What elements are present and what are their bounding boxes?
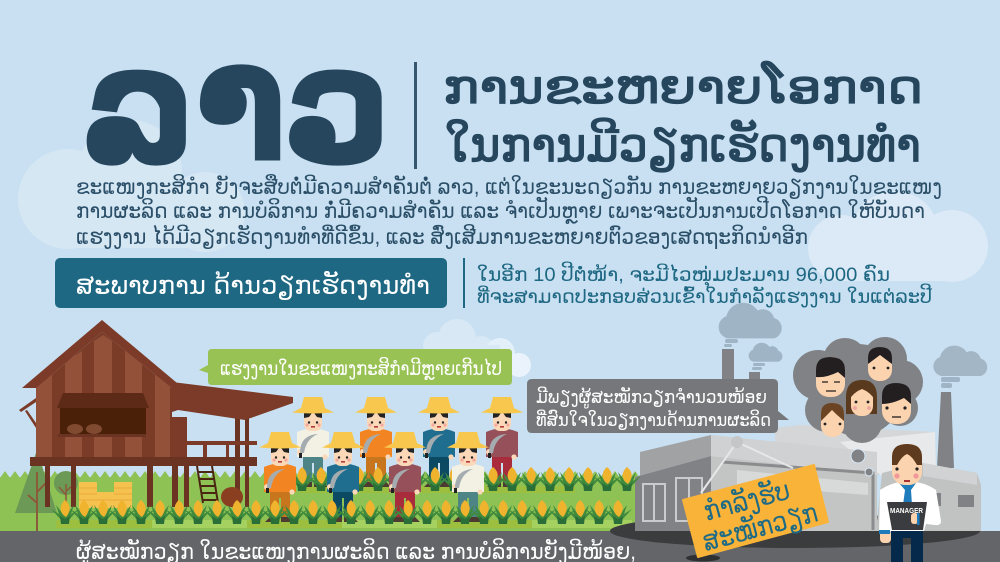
factory shadow [610, 514, 980, 548]
cloud: smoke 1 [719, 303, 782, 338]
hanging sign [683, 436, 828, 562]
rail [172, 441, 257, 457]
small bubble 1 [851, 449, 865, 463]
sign strings [701, 442, 793, 493]
tie [899, 483, 916, 505]
gutter [722, 462, 873, 530]
back row rice [288, 467, 641, 491]
factory building [635, 425, 981, 531]
face 3 [846, 380, 877, 416]
tree: triangle [15, 450, 57, 531]
left hand [880, 530, 891, 543]
clipboard [887, 502, 927, 530]
door [171, 417, 187, 457]
small bubble 2 [865, 468, 873, 476]
trousers [891, 525, 923, 562]
callout: too many agricultural workers: ແຮງງານໃນຂະແໜງກະສິກຳມີຫຼາຍເກີນໄປ [220, 356, 502, 381]
left block roof [635, 435, 711, 477]
sign board [683, 465, 828, 557]
thought bubble with faces [793, 337, 923, 476]
chimneys [722, 349, 954, 468]
title heading: ໃນການມີວຽກເຮັດງານທຳ [445, 118, 921, 172]
main roof band [711, 435, 877, 475]
manager figure [879, 444, 941, 562]
back roof [775, 425, 936, 475]
callout: few applicants: ທີ່ສົນໃຈໃນວຽກງານດ້ານການຜະລິດ [536, 409, 771, 430]
background cloud left [18, 120, 245, 252]
right hand [911, 513, 918, 524]
veranda roof [172, 382, 293, 420]
title divider [414, 62, 417, 169]
face 5 [821, 403, 844, 437]
shirt [879, 481, 941, 534]
intro paragraph: ຂະແໜງກະສິກຳ ຍັງຈະສືບຕໍ່ມີຄວາມສຳຄັນຕໍ່ ລາວ, ແຕ່ໃນຂະນະດຽວກັນ ການຂະຫຍາຍວຽກງານໃນຂະແໜງ [76, 173, 942, 199]
title heading: ການຂະຫຍາຍໂອກາດ [443, 61, 923, 113]
right wing windows [958, 495, 974, 507]
window left [643, 484, 665, 521]
sign text: ກຳລັງຮັບ [700, 475, 793, 527]
youth workforce statement [477, 260, 932, 308]
front row rice [51, 500, 632, 524]
side eave [19, 398, 36, 428]
left block wall [635, 456, 711, 531]
sign text: ສະໝັກວຽກ [699, 497, 821, 557]
window [60, 408, 146, 435]
callout: few applicants [527, 379, 789, 433]
banner: employment situation [55, 258, 447, 308]
right wing [876, 463, 981, 531]
back row farmers [292, 397, 523, 487]
clay pot [221, 487, 243, 507]
big title: Lao: ລາວ [82, 18, 391, 193]
banner side divider [463, 258, 465, 308]
front row farmers [259, 432, 489, 522]
ground road [0, 531, 1000, 562]
title heading [443, 61, 923, 172]
cloud: smoke 3 [933, 346, 987, 376]
grass field [0, 471, 640, 531]
stilt house [19, 320, 293, 507]
main wall [711, 456, 877, 531]
main roof [22, 320, 177, 388]
banner: employment situation: ສະພາບການ ດ້ານວຽກເຮັດງານທຳ [76, 269, 430, 300]
smoke clouds and chimneys [719, 303, 987, 468]
face 4 [882, 383, 911, 424]
hay bales [79, 482, 132, 508]
walls [36, 332, 172, 458]
floor beam [30, 457, 257, 466]
smoke puffs [724, 339, 960, 388]
face 1 [816, 357, 845, 397]
sign shadow [686, 554, 720, 562]
youth workforce statement: ທີ່ຈະສາມາດປະກອບສ່ວນເຂົ້າໃນກຳລັງແຮງງານ ໃນແຕ່ລະປີ [477, 282, 932, 308]
shutter [737, 470, 868, 495]
intro paragraph: ການຜະລິດ ແລະ ການບໍລິການ ກໍ່ມີຄວາມສຳຄັນ ແລະ ຈຳເປັນຫຼາຍ ເພາະຈະເປັນການເປີດໂອກາດ ໃຫ້ບັນດາ [76, 196, 925, 225]
background cloud center [423, 319, 531, 377]
tree: round [54, 471, 78, 505]
face 2 [868, 347, 892, 381]
window right [676, 478, 702, 521]
head [892, 444, 922, 485]
youth workforce statement: ໃນອີກ 10 ປີຕໍ່ໜ້າ, ຈະມີໄວໜຸ່ມປະມານ 96,000 ຄົນ [477, 260, 890, 288]
window sill [58, 434, 146, 437]
callout: few applicants: ມີພຽງຜູ້ສະໝັກວຽກຈຳນວນໜ້ອຍ [536, 386, 767, 408]
sign text [692, 469, 821, 557]
callout: too many agricultural workers [199, 349, 512, 385]
bubble blob [793, 337, 923, 443]
stilts [45, 416, 249, 507]
intro paragraph: ແຮງງານ ໄດ້ມີວຽກເຮັດງານທຳທີ່ດີຂຶ້ນ, ແລະ ສົ່ງເສີມການຂະຫຍາຍຕົວຂອງເສດຖະກິດນຳອີກ [76, 223, 808, 249]
intro paragraph [76, 173, 942, 249]
clipboard label: MANAGER [890, 508, 923, 515]
window baskets [67, 424, 83, 434]
ladder [197, 466, 218, 503]
awning [57, 393, 149, 408]
cuffs [879, 530, 890, 534]
cloud: smoke 2 [749, 343, 782, 362]
background cloud right [808, 191, 988, 282]
